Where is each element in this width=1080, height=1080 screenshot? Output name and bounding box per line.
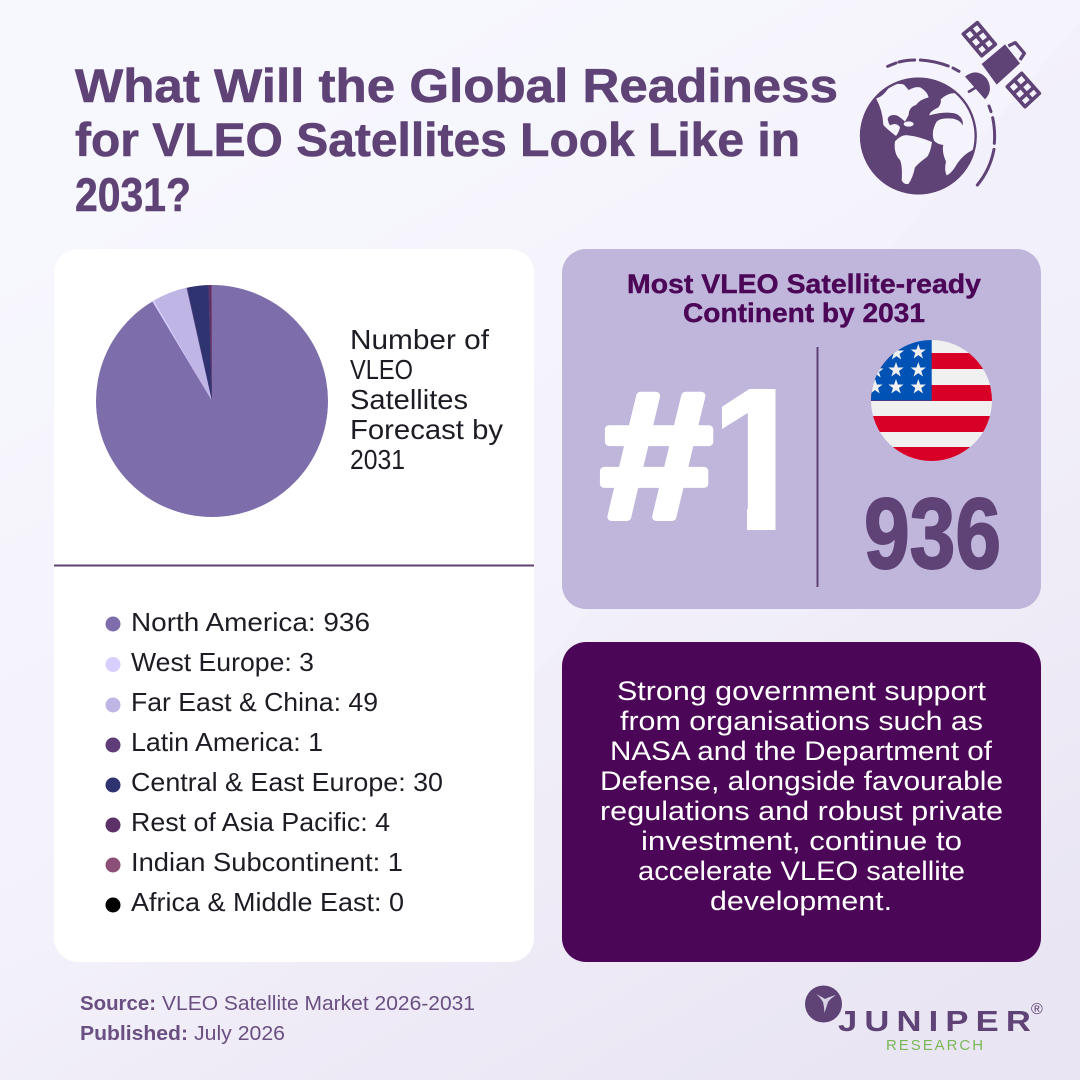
big number 936: 936 xyxy=(864,478,1001,590)
body text: accelerate VLEO satellite xyxy=(638,856,965,886)
title: 2031? xyxy=(75,168,191,221)
chart label: Forecast by xyxy=(350,414,503,445)
body text: regulations and robust private xyxy=(600,796,1003,826)
rank number xyxy=(600,389,776,530)
panel heading: Continent by 2031 xyxy=(683,298,925,328)
source and publication date: July 2026 xyxy=(194,1023,285,1045)
logo: Juniper Research xyxy=(805,986,1043,1054)
chart label: Satellites xyxy=(350,384,468,415)
source and publication date: VLEO Satellite Market 2026-2031 xyxy=(162,993,475,1015)
body text: investment, continue to xyxy=(641,826,962,856)
chart label xyxy=(350,324,503,475)
source and publication date: Source: xyxy=(80,993,156,1015)
icon: US flag xyxy=(867,340,992,461)
rank number: # xyxy=(601,356,712,555)
panel: most ready continent xyxy=(562,249,1041,609)
chart label: 2031 xyxy=(350,444,405,475)
icon: orbit dashes xyxy=(888,60,995,185)
title: What Will the Global Readiness xyxy=(75,59,838,112)
body text xyxy=(600,676,1003,916)
body text: from organisations such as xyxy=(620,706,983,736)
panel: pie chart and legend xyxy=(54,249,534,962)
title xyxy=(75,59,838,221)
body text: Strong government support xyxy=(617,676,987,706)
rank number: 1 xyxy=(700,345,814,574)
body text: development. xyxy=(710,886,892,916)
panel heading xyxy=(627,269,981,328)
legend: Far East & China: 49 xyxy=(131,687,378,717)
body text: Defense, alongside favourable xyxy=(600,766,1003,796)
source and publication date xyxy=(80,993,475,1045)
logo: Juniper Research: JUNIPER xyxy=(838,1006,1038,1038)
legend: Rest of Asia Pacific: 4 xyxy=(131,807,390,837)
chart label: VLEO xyxy=(350,354,413,385)
legend xyxy=(106,607,443,917)
body text: NASA and the Department of xyxy=(610,736,993,766)
legend: North America: 936 xyxy=(131,607,370,637)
icon: globe xyxy=(860,78,977,194)
logo: Juniper Research: RESEARCH xyxy=(886,1037,985,1054)
panel: explanatory text xyxy=(562,642,1041,962)
panel heading: Most VLEO Satellite-ready xyxy=(627,269,981,299)
logo: Juniper Research: ® xyxy=(1031,1001,1043,1018)
pie chart xyxy=(96,285,328,517)
legend: Africa & Middle East: 0 xyxy=(131,887,404,917)
title: for VLEO Satellites Look Like in xyxy=(75,113,800,166)
legend: Central & East Europe: 30 xyxy=(131,767,443,797)
legend: Indian Subcontinent: 1 xyxy=(131,847,403,877)
chart label: Number of xyxy=(350,324,489,355)
icon: globe with orbiting satellite xyxy=(860,23,1039,194)
source and publication date: Published: xyxy=(80,1023,188,1045)
icon: satellite xyxy=(963,23,1039,107)
legend: West Europe: 3 xyxy=(131,647,314,677)
legend: Latin America: 1 xyxy=(131,727,323,757)
